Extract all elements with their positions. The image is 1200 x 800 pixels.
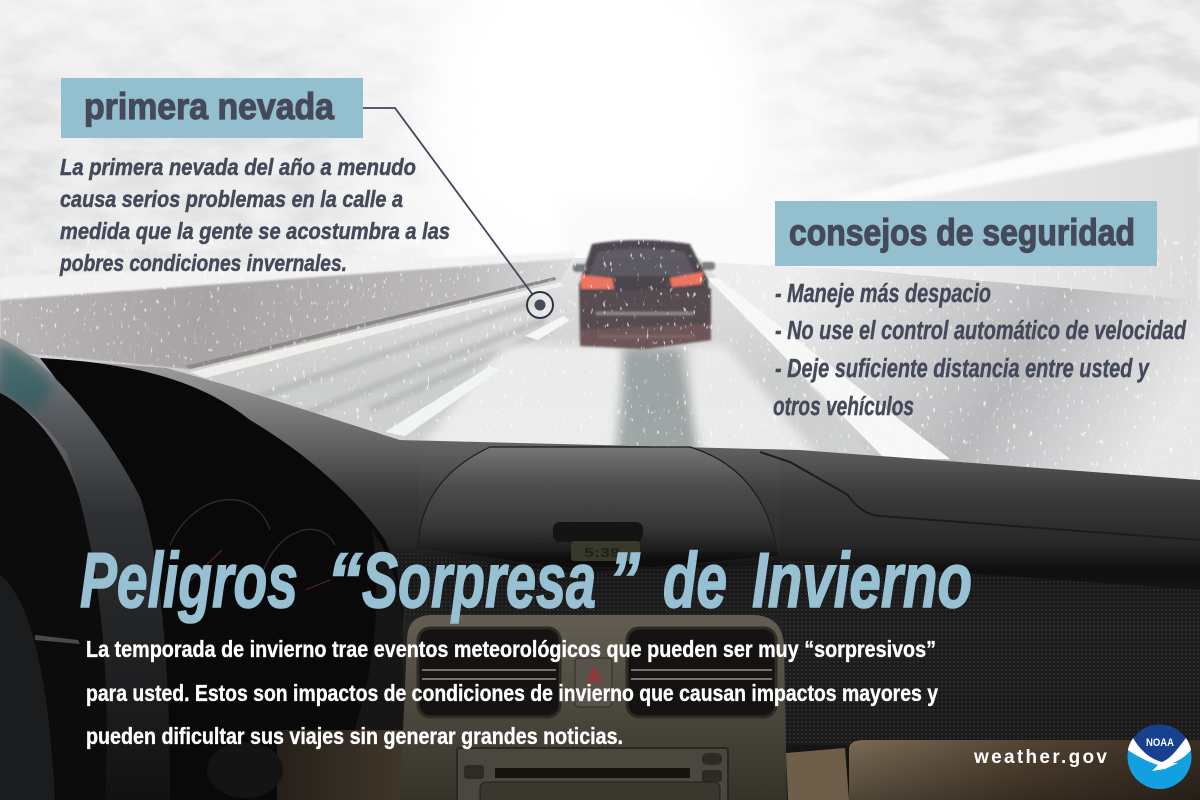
description: [59, 154, 450, 276]
safety tips: otros vehículos: [773, 393, 914, 421]
steering wheel: [0, 338, 170, 800]
panel: primera nevada: [59, 78, 450, 276]
title: ”: [609, 536, 640, 624]
icon: NOAA logo: [1128, 724, 1192, 789]
icon: NOAA logo: NOAA: [1146, 737, 1174, 749]
glovebox hump: [418, 447, 778, 568]
description: pobres condiciones invernales.: [59, 250, 347, 276]
marker: [527, 292, 553, 318]
description: causa serios problemas en la calle a: [60, 186, 403, 212]
lower console: [277, 730, 403, 800]
left vent: [418, 628, 560, 717]
distant haze at horizon: [560, 200, 790, 280]
right vent: [627, 628, 776, 717]
falling snow specks: [0, 230, 1200, 480]
title: [80, 536, 972, 624]
lane markings: [185, 277, 950, 459]
title: de: [663, 536, 727, 624]
car ahead: [573, 240, 715, 349]
title: “: [327, 536, 362, 624]
dark wheel track: [615, 348, 700, 465]
panel: consejos de seguridad: [773, 201, 1187, 421]
heading box: [775, 201, 1157, 266]
latch and clock: [553, 522, 643, 561]
intro text: [86, 636, 938, 749]
safety tips: [773, 280, 1187, 421]
road surface: [32, 258, 870, 456]
title: Peligros: [80, 536, 298, 624]
road streaks: [250, 300, 550, 420]
dashboard panel seam: [760, 452, 1200, 540]
description: medida que la gente se acostumbra a las: [60, 218, 450, 244]
intro text: La temporada de invierno trae eventos meteorológicos que pueden ser muy “sorpresivos”: [86, 636, 936, 662]
tan lower dash: [786, 748, 849, 800]
dashboard: [0, 345, 1200, 800]
instrument cluster hood: [40, 358, 403, 800]
title: Invierno: [752, 536, 972, 624]
gauges: [170, 500, 335, 590]
left guard rail: [0, 257, 575, 370]
intro text: para usted. Estos son impactos de condiciones de invierno que causan impactos mayores y: [86, 680, 938, 706]
centre stack: [400, 615, 787, 800]
sky glow: [400, 0, 780, 280]
right guard wall: [811, 146, 1200, 300]
heading box: [61, 78, 363, 138]
windshield view: [0, 0, 1200, 500]
latch and clock: 5:39: [584, 545, 620, 560]
dashboard textured lower: [780, 560, 1200, 745]
radio: [457, 748, 728, 800]
safety tips: - Maneje más despacio: [775, 280, 991, 308]
website: weather.gov: [973, 747, 1107, 768]
snowy trees, left: [0, 0, 428, 323]
hazard button: [575, 658, 612, 707]
bright slush near centre: [424, 341, 624, 446]
snowy trees, right: [761, 0, 1200, 234]
title: Sorpresa: [362, 536, 596, 624]
callout leader line and marker: [363, 108, 553, 318]
intro text: pueden dificultar sus viajes sin generar grandes noticias.: [86, 723, 623, 749]
description: La primera nevada del año a menudo: [60, 154, 416, 180]
heading: primera nevada: [84, 86, 334, 127]
heading: consejos de seguridad: [789, 212, 1135, 253]
